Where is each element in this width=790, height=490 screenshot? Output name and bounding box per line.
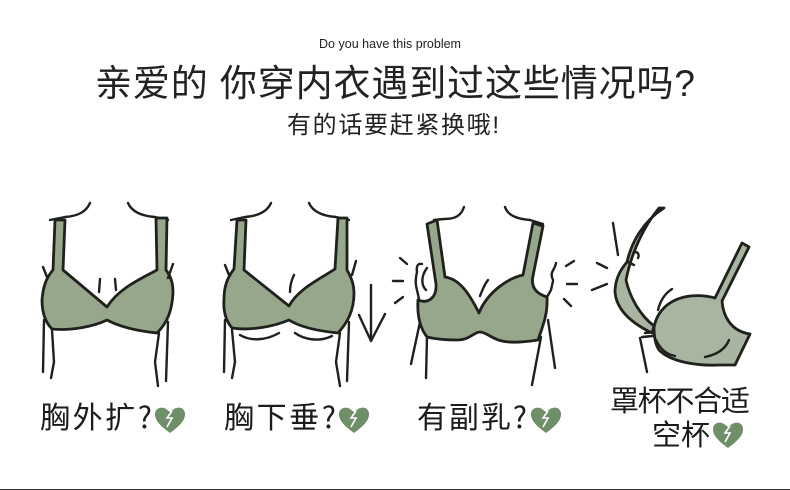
motion ticks right: [564, 261, 577, 306]
panel: sagging: [224, 203, 385, 437]
subtitle: English: Do you have this problem: [319, 36, 461, 51]
caption line 2: 空杯: [652, 412, 710, 454]
cup details and motion ticks: [592, 223, 729, 372]
arm and torso lines: [43, 264, 173, 386]
neck and shoulder lines: [231, 203, 349, 220]
panel: side boob: [393, 207, 577, 437]
title: 亲爱的 你穿内衣遇到过这些情况吗?: [95, 63, 695, 104]
caption: 有副乳?: [417, 393, 527, 437]
caption: 胸下垂?: [224, 393, 336, 437]
neck and shoulder lines: [434, 207, 543, 224]
motion ticks left: [393, 258, 407, 303]
neck and shoulder lines: [50, 203, 168, 220]
arm, armpit and torso lines: [411, 263, 556, 385]
bottom rule: [0, 489, 790, 490]
bra illustration 1: [42, 218, 173, 333]
strap and back band: [615, 208, 664, 333]
panel: breast spreading outward: [40, 203, 185, 437]
caption line 1: 罩杯不合适: [610, 378, 750, 420]
caption: 胸外扩?: [40, 393, 152, 437]
subheading: 有的话要赶紧换哦!: [287, 112, 499, 139]
bra illustration 3: [418, 220, 547, 342]
icon: broken heart: [339, 408, 369, 433]
icon: broken heart: [713, 423, 743, 448]
body lines and under-cup creases: [224, 261, 356, 386]
bra illustration 2: [224, 218, 354, 333]
icon: broken heart: [531, 408, 561, 433]
panel: wrong cup size: [592, 208, 750, 454]
arrow: downward: [359, 285, 385, 341]
bra cup side view: [654, 243, 750, 365]
icon: broken heart: [155, 408, 185, 433]
